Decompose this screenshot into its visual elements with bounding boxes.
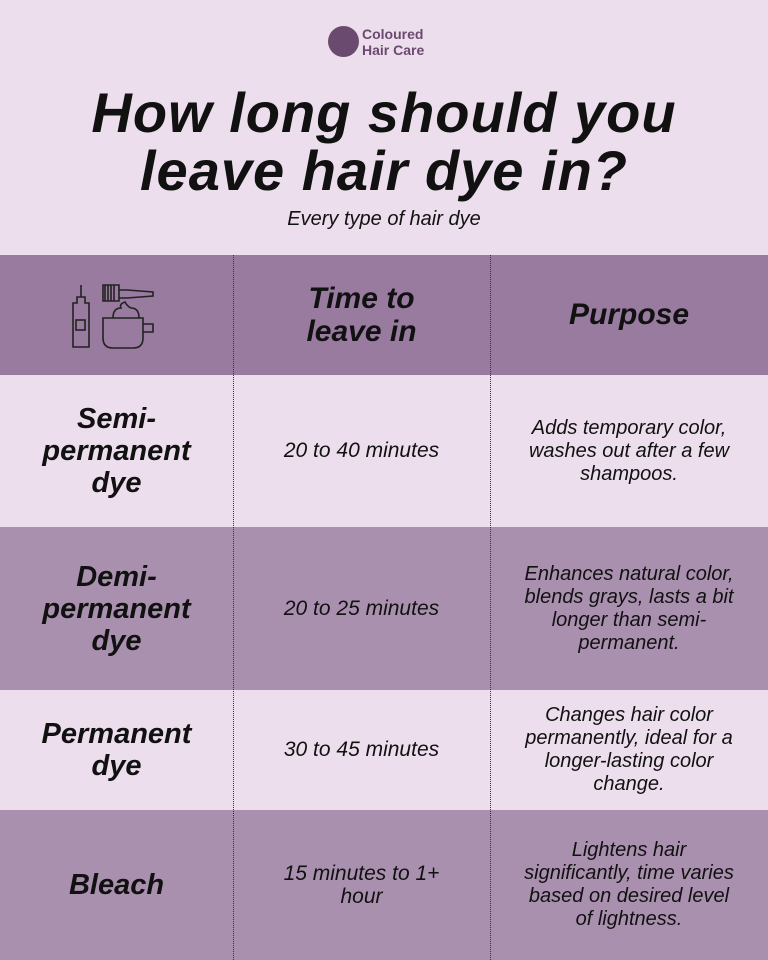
header: time [306, 282, 417, 348]
row: permanent: Permanent [42, 718, 191, 750]
row: demi-permanent [0, 527, 768, 690]
row: permanent: Changes hair color permanently, ideal for a longer-lasting color change. [525, 704, 733, 795]
logo text: Coloured [362, 26, 423, 42]
icon: hair dye tools [72, 284, 154, 349]
row: semi-permanent [0, 375, 768, 527]
header: purpose: Purpose [569, 298, 689, 331]
row: demi-permanent: Demi- [76, 560, 157, 592]
header: time: leave in [306, 315, 417, 348]
row: semi-permanent: Adds temporary color, washes out after a few shampoos. [529, 416, 729, 484]
row: permanent: 30 to 45 minutes [284, 738, 439, 761]
subtitle: Every type of hair dye [287, 208, 481, 230]
row: semi-permanent: 20 to 40 minutes [284, 439, 439, 462]
row: bleach [0, 810, 768, 960]
row: demi-permanent: dye [92, 624, 141, 656]
row: bleach: Lightens hair significantly, time varies based on desired level of lightness. [524, 839, 734, 930]
row: demi-permanent: permanent [42, 592, 191, 624]
title: leave hair dye in? [140, 139, 628, 202]
logo text [362, 26, 424, 58]
row: permanent: dye [92, 750, 141, 782]
row: semi-permanent: Semi- [77, 403, 156, 435]
row: semi-permanent: dye [92, 467, 141, 499]
title [91, 81, 677, 202]
icon: logo circle [328, 26, 359, 57]
title: How long should you [91, 81, 677, 144]
row: demi-permanent: 20 to 25 minutes [284, 596, 439, 620]
row: permanent [0, 690, 768, 810]
header: time: Time to [308, 282, 415, 315]
logo text: Hair Care [362, 42, 424, 58]
logo [328, 26, 424, 58]
row: demi-permanent: Enhances natural color, blends grays, lasts a bit longer than semi-permanent. [524, 562, 734, 654]
row: bleach: 15 minutes to 1+ hour [284, 862, 439, 908]
row: bleach: Bleach [69, 869, 164, 901]
row: semi-permanent: permanent [42, 435, 191, 467]
header row [0, 255, 768, 375]
